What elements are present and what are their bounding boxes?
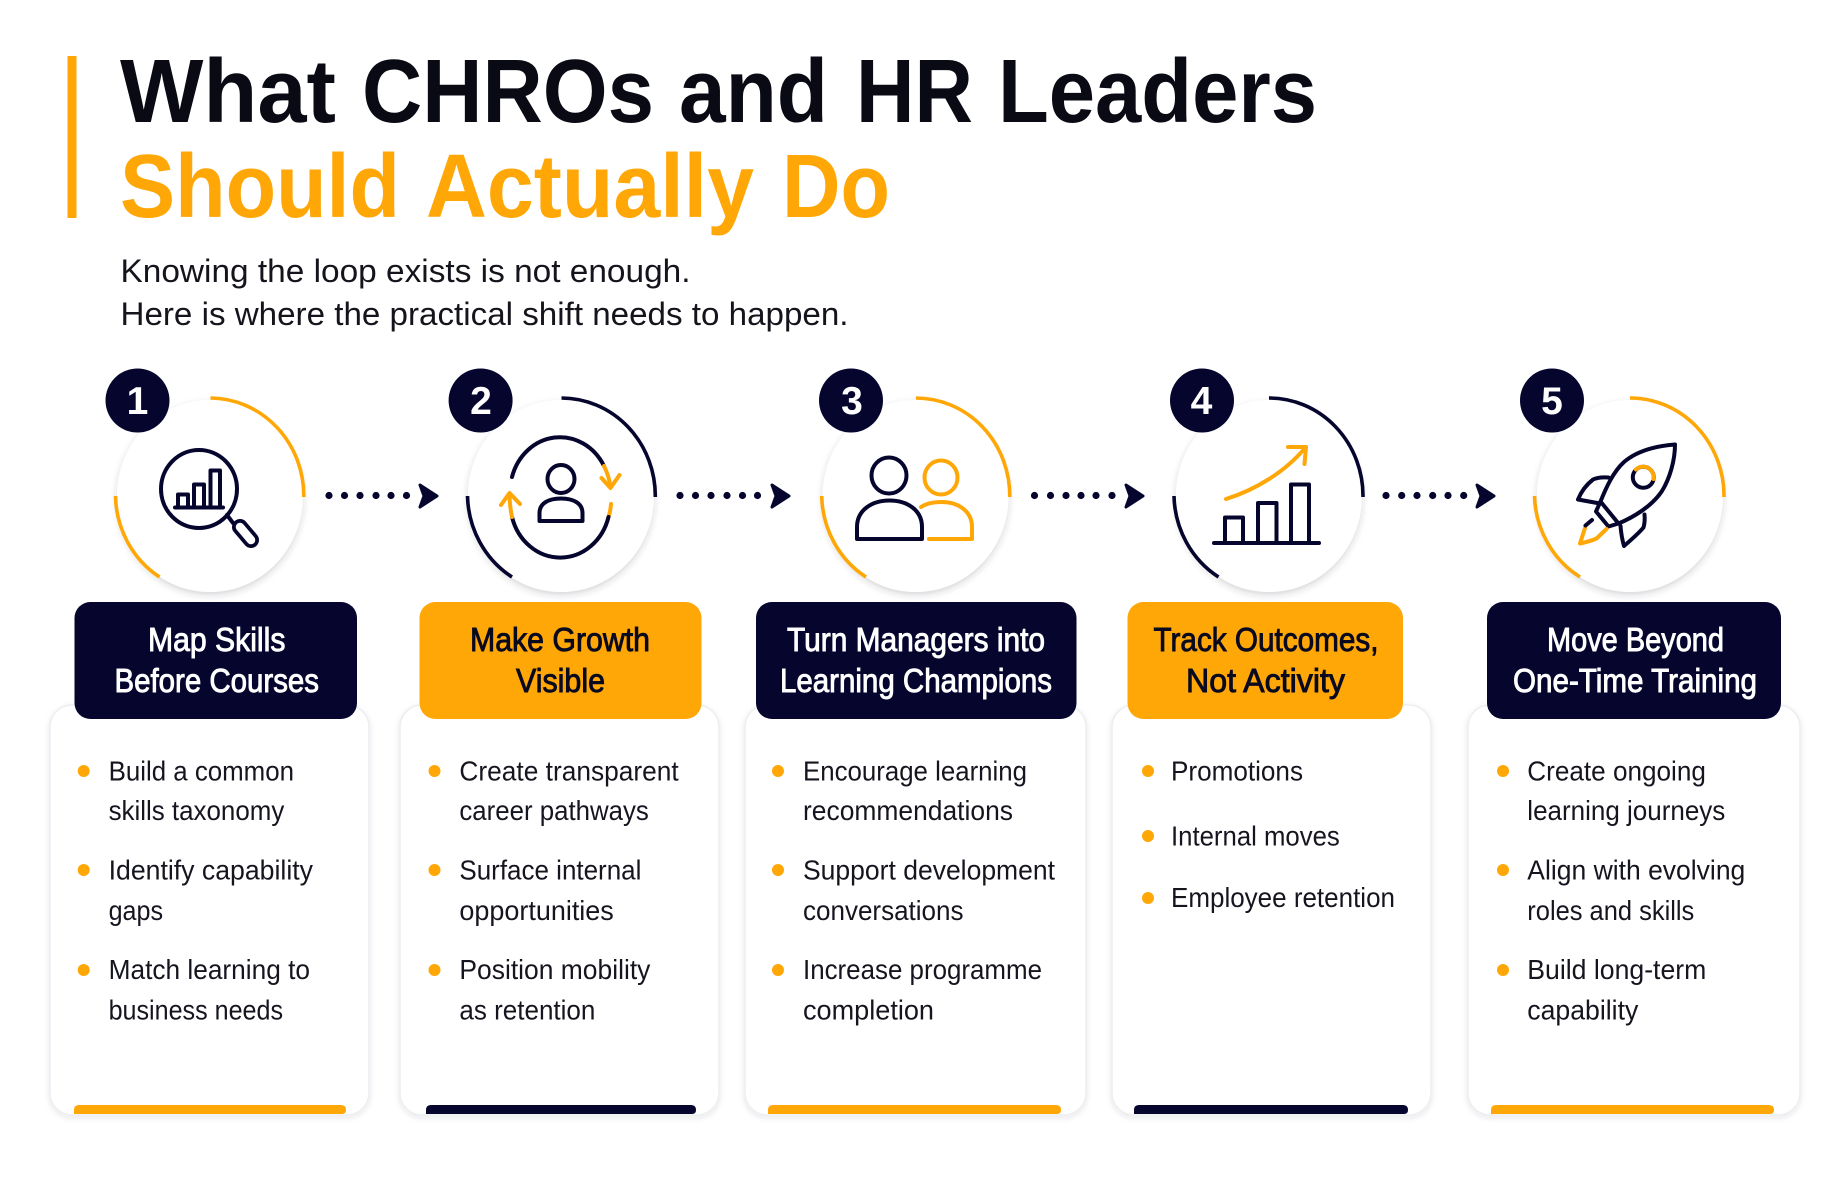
title line 2: Actually <box>426 137 754 237</box>
step 2 header <box>420 602 702 719</box>
step 1 arcs <box>116 398 304 577</box>
step 3 card bottom bar <box>768 1105 1061 1114</box>
title line 1: and <box>679 42 828 142</box>
step 3 icon circle <box>823 400 1009 592</box>
step 2 bullets <box>428 756 679 1026</box>
step 1 bullets: gaps <box>109 895 163 926</box>
icon: rocket <box>1578 444 1675 546</box>
title line 1: Leaders <box>998 42 1317 142</box>
step 1 icon circle <box>117 400 303 592</box>
step 4 bullets <box>1142 756 1395 913</box>
step 1 number badge: 1 <box>127 380 148 423</box>
step 5 card bottom bar <box>1491 1105 1774 1114</box>
step 4 bullets: Employee retention <box>1171 882 1395 913</box>
step 1 bullets: skills taxonomy <box>109 795 284 826</box>
step 1 bullets: Identify capability <box>109 854 313 886</box>
step 2 panel <box>400 368 719 1115</box>
step 3 bullets <box>772 756 1055 1026</box>
step 2 bullets: as retention <box>459 994 595 1026</box>
step 5 arcs <box>1534 398 1724 577</box>
step 4 number badge <box>1170 368 1234 432</box>
step 2 card <box>400 705 719 1115</box>
arrow 2 to 3 <box>676 485 789 507</box>
step 4 header: Not Activity <box>1186 662 1345 699</box>
step 3 card <box>745 705 1086 1115</box>
arrow 1 to 2 <box>325 485 437 507</box>
step 5 header <box>1487 602 1781 719</box>
step 1 bullets: Build a common <box>109 756 294 786</box>
arrow 3 to 4 <box>1031 485 1143 507</box>
step 5 number badge <box>1520 368 1584 432</box>
step 2 card bottom bar <box>426 1105 696 1114</box>
step 1 bullets <box>78 756 313 1026</box>
step 5 bullets: Align with evolving <box>1527 854 1745 886</box>
title line 1: CHROs <box>362 42 654 142</box>
step 5 number badge: 5 <box>1541 380 1563 423</box>
step 4 header: Track Outcomes, <box>1154 621 1378 658</box>
step 2 bullets: opportunities <box>459 895 614 926</box>
step 3 number badge <box>819 368 883 432</box>
step 4 bullets: Internal moves <box>1171 821 1340 852</box>
step 3 bullets: conversations <box>803 895 964 926</box>
step 5 bullets: roles and skills <box>1527 895 1694 926</box>
step 5 header: Move Beyond <box>1547 621 1724 658</box>
title block <box>68 42 1317 237</box>
step 3 bullets: completion <box>803 994 934 1026</box>
step 4 card <box>1112 705 1431 1115</box>
accent bar <box>68 56 76 218</box>
step 2 arcs <box>468 398 655 577</box>
icon: person with cycle arrows <box>501 437 620 558</box>
step 5 card <box>1468 705 1800 1115</box>
step 2 bullets: Position mobility <box>459 954 650 985</box>
title line 2: Do <box>782 137 890 237</box>
step 4 arcs <box>1174 398 1363 577</box>
step 4 bullets: Promotions <box>1171 756 1303 786</box>
step 3 header <box>756 602 1076 719</box>
step 5 bullets: Create ongoing <box>1527 756 1706 786</box>
step 1 header: Map Skills <box>148 621 285 658</box>
step 2 header: Visible <box>516 662 605 699</box>
step 1 card <box>50 705 369 1115</box>
step 1 bullets: business needs <box>109 994 283 1026</box>
step 1 header <box>74 602 357 719</box>
step 3 header: Learning Champions <box>780 662 1052 699</box>
step 3 arcs <box>822 398 1010 577</box>
icon: growth chart with arrow <box>1214 447 1319 543</box>
title line 1 <box>120 42 1317 142</box>
step 3 bullets: Increase programme <box>803 954 1042 985</box>
icon: magnifier with chart <box>161 450 251 540</box>
step 2 icon circle <box>468 400 654 592</box>
arrow 4 to 5 <box>1382 485 1494 507</box>
step 1 number badge <box>106 368 170 432</box>
step 3 bullets: Encourage learning <box>803 756 1027 786</box>
title line 2: Should <box>120 137 400 237</box>
step 2 header: Make Growth <box>470 621 650 658</box>
step 4 number badge: 4 <box>1191 380 1213 423</box>
step 4 card bottom bar <box>1134 1105 1408 1114</box>
step 1 header: Before Courses <box>114 662 319 699</box>
step 3 bullets: recommendations <box>803 795 1013 826</box>
step 5 header: One-Time Training <box>1513 662 1757 699</box>
step 1 card bottom bar <box>74 1105 346 1114</box>
icon: two people <box>857 458 972 539</box>
step 5 panel <box>1468 368 1800 1115</box>
step 3 header: Turn Managers into <box>787 621 1045 658</box>
step 2 bullets: Create transparent <box>459 756 679 786</box>
title line 1: HR <box>856 42 973 142</box>
step 2 bullets: Surface internal <box>459 854 641 886</box>
step 2 number badge: 2 <box>470 380 492 423</box>
step 5 icon circle <box>1537 400 1723 592</box>
title line 1: What <box>120 42 336 142</box>
step 3 bullets: Support development <box>803 854 1055 886</box>
title line 2 <box>120 137 890 237</box>
step 1 panel <box>50 368 369 1115</box>
step 5 bullets: Build long-term <box>1527 954 1706 985</box>
subtitle: Here is where the practical shift needs to happen. <box>120 296 848 332</box>
step 3 panel <box>745 368 1086 1115</box>
step 5 bullets <box>1497 756 1745 1026</box>
step 4 header <box>1128 602 1403 719</box>
step 3 number badge: 3 <box>841 380 863 423</box>
step 2 bullets: career pathways <box>459 795 649 826</box>
subtitle <box>120 253 848 332</box>
step 5 bullets: learning journeys <box>1527 795 1725 826</box>
step 2 number badge <box>449 368 513 432</box>
step 1 bullets: Match learning to <box>109 954 310 985</box>
step 5 bullets: capability <box>1527 994 1638 1026</box>
step 4 panel <box>1112 368 1431 1115</box>
step 4 icon circle <box>1176 400 1362 592</box>
subtitle: Knowing the loop exists is not enough. <box>120 253 690 289</box>
